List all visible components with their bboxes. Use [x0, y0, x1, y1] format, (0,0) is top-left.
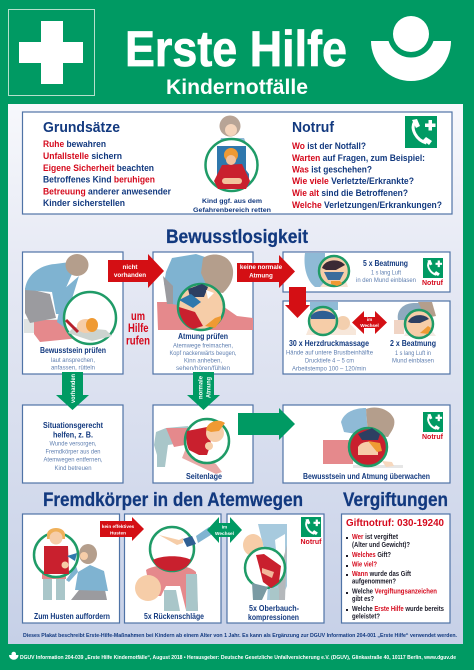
panel: 5x Rückenschläge: [124, 514, 221, 623]
description: Mund einblasen: [392, 358, 434, 364]
label: Zum Husten auffordern: [34, 612, 110, 621]
icon: emergency phone: [423, 412, 443, 432]
panel: 5x Oberbauchkompressionen: [227, 514, 324, 623]
arrow: keine normale Atmung: [237, 255, 295, 288]
panel: Seitenlage: [153, 405, 253, 483]
heading: Giftnotruf: Giftnotruf: 030-19240: [346, 517, 444, 529]
list: Notruf questions: Welche Verletzungen/Erkrankungen?: [292, 200, 442, 210]
list: Notruf questions: [292, 141, 442, 210]
list: questions: geleistet?: [352, 614, 380, 620]
panel: Situationsgerecht helfen: [22, 405, 123, 483]
callout: um Hilfe rufen: um: [131, 311, 145, 323]
label: Notruf: Notruf: [300, 537, 322, 546]
arrow: kein effektives Husten: [100, 517, 144, 541]
arrow: vorhanden: [56, 372, 89, 410]
arrow: kein effektives Husten: kein effektives: [102, 524, 135, 529]
label: Notruf: Notruf: [422, 432, 443, 441]
caption: child rescue: [193, 198, 271, 214]
label: Seitenlage: [186, 472, 223, 481]
label: Notruf: Notruf: [422, 278, 443, 287]
caption: child rescue: Kind ggf. aus dem: [202, 198, 262, 205]
title: Erste Hilfe: [125, 21, 347, 77]
list: Grundsätze: [43, 139, 171, 208]
callout: um Hilfe rufen: [126, 311, 150, 348]
label: 5x Oberbauch-: [249, 604, 299, 613]
description: Hände auf untere Brustbeinhälfte: [286, 350, 373, 356]
illustration: recovery position: [154, 419, 229, 474]
arrow: im Wechsel: im: [222, 524, 227, 530]
arrow: vorhanden: vorhanden: [70, 374, 77, 403]
description: 1 s lang Luft: [371, 270, 401, 276]
small DGUV logo: [9, 652, 18, 660]
arrow: nicht vorhanden: [108, 254, 164, 288]
list: Notruf questions: Wo ist der Notfall?: [292, 141, 366, 151]
description: [51, 357, 95, 372]
arrow: im Wechsel: [352, 311, 387, 334]
footer imprint: DGUV Information 204-039 „Erste Hilfe Kindernotfälle“, August 2018 • Herausgeber: Deutsche Gesetzliche Unfallversicherung e.V. (DGUV), Glinkastraße 40, 10117 Berlin, www.dguv.de: [20, 655, 456, 661]
label: [248, 604, 299, 622]
label: 5 x Beatmung: [363, 258, 408, 268]
illustration: checking consciousness: [24, 254, 116, 344]
arrow: keine normale Atmung: Atmung: [249, 272, 273, 280]
description: Fremdkörper aus den: [46, 448, 101, 456]
label: 2 x Beatmung: [390, 338, 436, 348]
description: Drucktiefe 4 – 5 cm: [305, 358, 354, 364]
DGUV logo: [371, 10, 451, 81]
arrow: nicht vorhanden: nicht: [122, 264, 138, 271]
list: questions: aufgenommen?: [352, 578, 396, 586]
heading: Grundsätze: Grundsätze: [43, 120, 120, 136]
description: Kopf nackenwärts beugen,: [170, 350, 237, 357]
list: questions: [346, 534, 444, 620]
description: Atemwege freimachen,: [173, 342, 233, 350]
description: 1 s lang Luft in: [395, 350, 431, 357]
illustration: chest compressions: [306, 302, 356, 335]
description: [392, 350, 434, 364]
panel: Bewusstsein prüfen: [22, 252, 123, 374]
heading: Situationsgerecht: [43, 421, 103, 430]
list: questions: (Alter und Gewicht)?: [352, 542, 410, 549]
icon: emergency phone: [423, 258, 443, 278]
description: [170, 342, 237, 372]
illustration: adult holding child: [206, 116, 258, 191]
description: [44, 440, 103, 472]
label: 5x Rückenschläge: [144, 612, 205, 621]
illustration: checking breathing: [157, 254, 253, 330]
panel: Grundsätze and Notruf: [22, 112, 452, 214]
arrow: keine normale Atmung: keine normale: [240, 264, 283, 271]
first aid cross sign: [8, 10, 94, 96]
heading: Notruf: Notruf: [292, 120, 334, 136]
description: Atemwegen entfernen,: [44, 456, 103, 464]
panel: Bewusstsein und Atmung überwachen: [283, 405, 450, 483]
illustration: abdominal thrusts: [243, 524, 287, 600]
list: Grundsätze: Ruhe bewahren: [43, 139, 106, 149]
heading: Vergiftungen: Vergiftungen: [343, 490, 448, 511]
subtitle: Kindernotfälle: [166, 76, 308, 99]
list: Notruf questions: Wie alt sind die Betroffenen?: [292, 188, 408, 198]
arrow: im Wechsel: Wechsel: [215, 531, 234, 536]
heading: helfen, z. B.: [53, 430, 93, 440]
panel: 5 x Beatmung: [283, 252, 450, 292]
label: Atmung prüfen: [178, 332, 228, 341]
list: questions: Welche Erste Hilfe wurde bereits: [352, 606, 444, 613]
list: questions: gibt es?: [352, 596, 374, 603]
description: [286, 350, 373, 372]
list: questions: Wie viel?: [352, 562, 377, 568]
arrow: im Wechsel: Wechsel: [360, 323, 379, 328]
panel: Zum Husten auffordern: [22, 514, 120, 623]
arrow: normale Atmung: [187, 372, 220, 410]
description: Arbeitstempo 100 – 120/min: [292, 366, 366, 372]
arrow: kein effektives Husten: Husten: [110, 530, 126, 536]
description: laut ansprechen,: [51, 357, 95, 364]
arrow: down to Herzdruckmassage: [285, 287, 310, 318]
main content panel: [8, 104, 463, 644]
list: Grundsätze: Betreuung anderer anwesender: [43, 186, 171, 196]
heading: Fremdkörper in den Atemwegen: Fremdkörper in den Atemwegen: [43, 490, 303, 511]
description: anfassen, rütteln: [51, 364, 95, 372]
list: questions: Welches Gift?: [352, 552, 391, 559]
arrow: im Wechsel: [207, 517, 242, 543]
arrow: nicht vorhanden: vorhanden: [114, 272, 146, 279]
description: in den Mund einblasen: [356, 277, 416, 284]
list: Grundsätze: Kinder sicherstellen: [43, 198, 125, 208]
description: Kinn anheben,: [184, 358, 222, 364]
arrow: normale Atmung: Atmung: [206, 377, 212, 398]
list: Notruf questions: Warten auf Fragen, zum Beispiel:: [292, 153, 425, 163]
label: Bewusstsein und Atmung überwachen: [303, 472, 430, 481]
icon: emergency phone: [405, 116, 437, 148]
illustration: monitoring: [323, 407, 403, 468]
caption: child rescue: Gefahrenbereich retten: [193, 207, 271, 214]
icon: emergency phone: [301, 517, 321, 537]
description: Kind betreuen: [54, 465, 92, 472]
arrow: im Wechsel: im: [367, 317, 372, 322]
illustration: coughing child: [34, 528, 108, 600]
description: [356, 270, 416, 284]
list: Grundsätze: Betroffenes Kind beruhigen: [43, 174, 155, 184]
label: Bewusstsein prüfen: [40, 346, 106, 355]
arrow: to monitoring: [238, 408, 295, 440]
list: Grundsätze: Eigene Sicherheit beachten: [43, 163, 154, 173]
list: questions: Wer ist vergiftet: [352, 534, 399, 541]
callout: um Hilfe rufen: Hilfe: [128, 323, 148, 335]
heading: Bewusstlosigkeit: Bewusstlosigkeit: [166, 227, 309, 248]
label: 30 x Herzdruckmassage: [289, 338, 369, 348]
list: Notruf questions: Wie viele Verletzte/Erkrankte?: [292, 176, 414, 186]
panel: Atmung prüfen: [153, 252, 253, 374]
panel: Vergiftungen: [342, 514, 450, 623]
illustration: ventilation: [304, 253, 349, 287]
panel: Herzdruckmassage and Beatmung: [283, 301, 450, 374]
arrow: normale Atmung: normale: [198, 376, 204, 399]
label: kompressionen: [248, 613, 299, 622]
heading: [43, 421, 103, 440]
callout: um Hilfe rufen: rufen: [126, 336, 150, 348]
illustration: back blows: [135, 527, 214, 611]
description: Wunde versorgen,: [50, 440, 97, 448]
illustration: ventilation: [394, 302, 436, 338]
list: Notruf questions: Was ist geschehen?: [292, 164, 372, 174]
list: questions: Wann wurde das Gift: [352, 571, 412, 578]
list: Grundsätze: Unfallstelle sichern: [43, 151, 122, 161]
list: questions: Welche Vergiftungsanzeichen: [352, 588, 437, 596]
description: sehen/hören/fühlen: [176, 365, 230, 372]
